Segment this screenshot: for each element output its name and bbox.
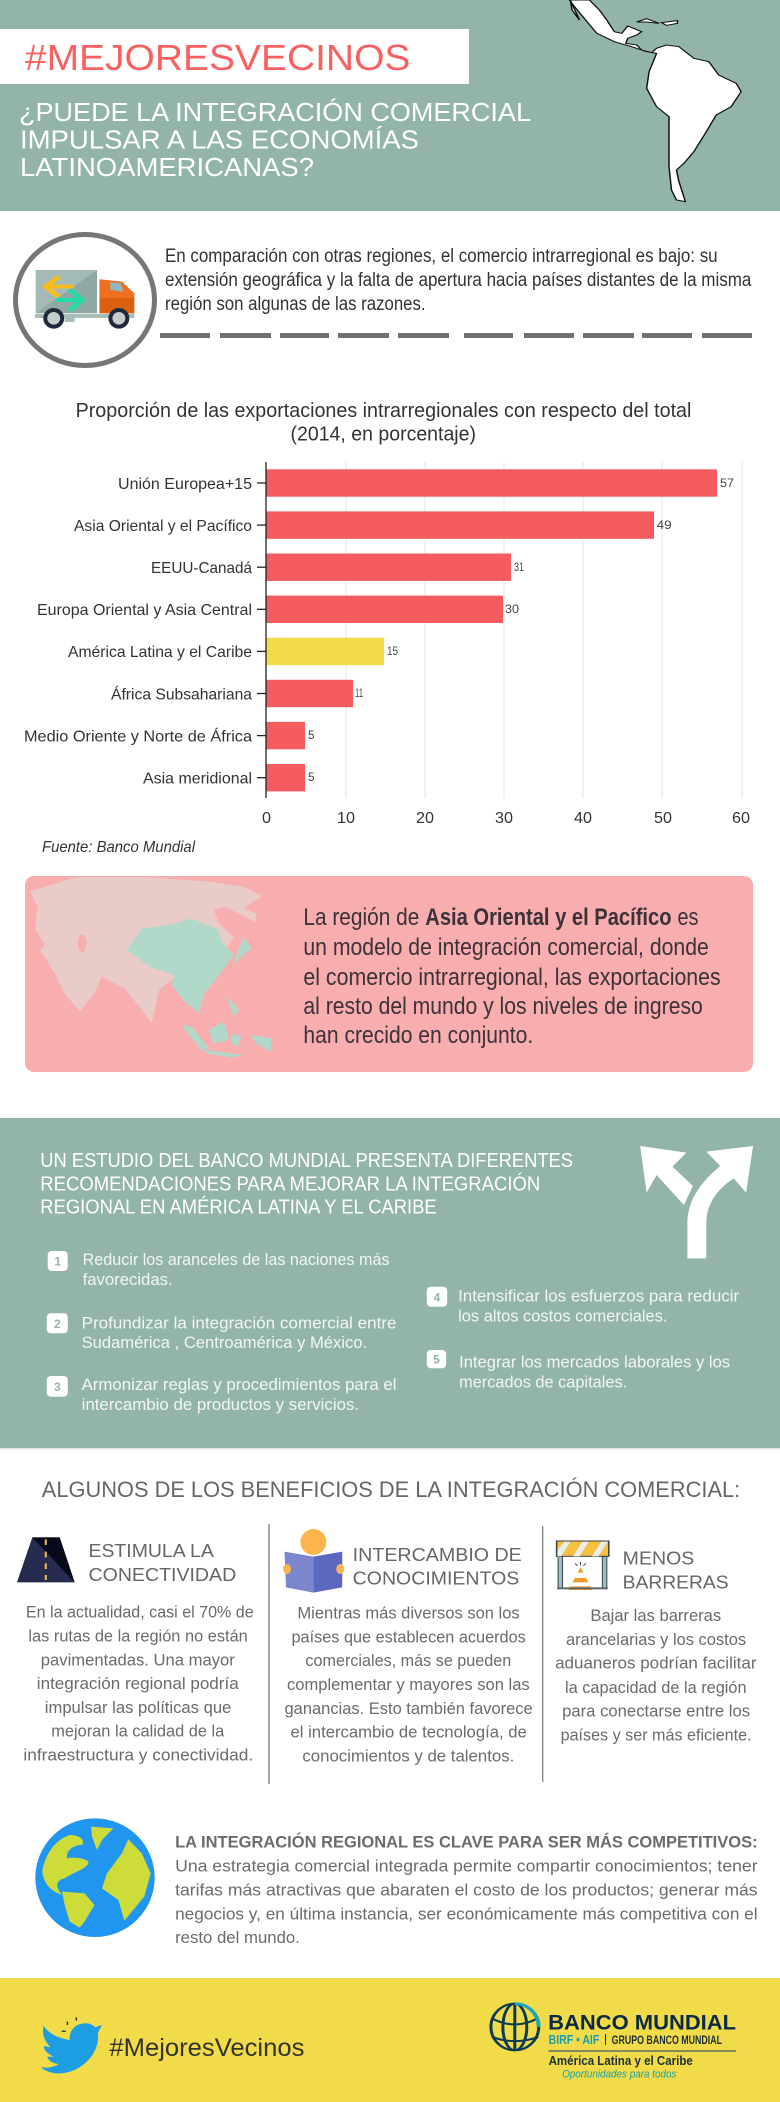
text block: callout: Asia Oriental y el Pacífico [425, 904, 672, 931]
value labels: 5 [308, 728, 315, 742]
list item 4: 4 [434, 1290, 441, 1304]
text block: intro: región son algunas de las razones. [165, 294, 426, 315]
text block: competitiveness: Una estrategia comercial integrada permite compartir conocimientos; tener [175, 1857, 758, 1876]
body text: países y ser más eficiente. [561, 1726, 752, 1745]
x axis labels: 40 [574, 810, 592, 827]
body text: impulsar las políticas que [45, 1698, 231, 1717]
subheading [88, 1540, 236, 1585]
heading: recommendations: RECOMENDACIONES PARA MEJORAR LA INTEGRACIÓN [40, 1172, 540, 1196]
body text: arancelarias y los costos [566, 1630, 746, 1649]
icon: map of Asia [30, 877, 271, 1057]
body text: ganancias. Esto también favorece [284, 1699, 533, 1718]
panel: Asia callout [25, 876, 753, 1072]
list item 3 [47, 1375, 397, 1414]
body text: complementar y mayores son las [287, 1675, 530, 1694]
value labels [308, 476, 734, 784]
x axis labels: 50 [654, 810, 672, 827]
body text: el intercambio de tecnología, de [290, 1723, 527, 1742]
benefit column: connectivity [17, 1537, 254, 1765]
panel: bar chart [24, 400, 750, 856]
list item 3: 3 [54, 1380, 61, 1394]
icon: truck in circle [16, 234, 154, 366]
body text: Mientras más diversos son los [297, 1603, 520, 1622]
text block: callout: al resto del mundo y los niveles de ingreso [303, 993, 703, 1020]
list item 1: Reducir los aranceles de las naciones más [83, 1250, 389, 1269]
body text: aduaneros podrían facilitar [555, 1654, 757, 1673]
panel: intro [16, 234, 752, 366]
x axis labels: 0 [262, 810, 271, 827]
body text: En la actualidad, casi el 70% de [26, 1603, 254, 1622]
heading: question: IMPULSAR A LAS ECONOMÍAS [20, 124, 419, 154]
list item 1: 1 [54, 1254, 61, 1268]
text block: competitiveness: resto del mundo. [175, 1928, 300, 1947]
body text: infraestructura y conectividad. [23, 1746, 253, 1765]
logo: Banco Mundial [491, 2004, 736, 2081]
icon: globe [35, 1818, 155, 1937]
list item 3: intercambio de productos y servicios. [82, 1395, 359, 1414]
list item 5: 5 [433, 1352, 440, 1366]
value labels: 5 [308, 770, 315, 784]
subheading [353, 1544, 522, 1588]
body text [555, 1606, 757, 1745]
benefit column: barriers [555, 1541, 757, 1745]
x axis labels [262, 810, 750, 827]
category labels: África Subsahariana [111, 684, 252, 704]
list item 4 [427, 1287, 739, 1326]
body text: conocimientos y de talentos. [302, 1747, 514, 1766]
text block: intro [165, 246, 752, 315]
x axis labels: 20 [416, 810, 434, 827]
heading: question [19, 97, 531, 182]
list item 4: Intensificar los esfuerzos para reducir [458, 1287, 739, 1306]
subheading [623, 1548, 729, 1592]
value labels: 15 [387, 644, 398, 658]
category labels: Medio Oriente y Norte de África [24, 726, 252, 746]
x axis labels: 60 [732, 810, 750, 827]
panel: header [0, 0, 780, 211]
source note: Fuente: Banco Mundial [42, 839, 195, 856]
category labels: EEUU-Canadá [151, 560, 252, 577]
icon: twitter bird [41, 2017, 102, 2073]
logo: Banco Mundial: Oportunidades para todos [562, 2069, 677, 2081]
value labels: 30 [505, 602, 519, 616]
panel: competitiveness [35, 1818, 758, 1947]
body text: la capacidad de la región [565, 1678, 747, 1697]
chart title [76, 400, 691, 446]
subheading: CONECTIVIDAD [88, 1564, 236, 1585]
body text: pavimentadas. Una mayor [41, 1650, 235, 1669]
bars [266, 469, 717, 791]
text block: intro: En comparación con otras regiones, el comercio intrarregional es bajo: su [165, 246, 718, 267]
benefit column: knowledge [283, 1529, 533, 1766]
subheading: MENOS [623, 1548, 694, 1568]
panel: footer [0, 1978, 780, 2102]
list item 4: los altos costos comerciales. [458, 1307, 668, 1326]
chart title: Proporción de las exportaciones intrarregionales con respecto del total [76, 400, 691, 422]
body text: para conectarse entre los [562, 1702, 750, 1721]
text block: callout: es [678, 904, 698, 931]
heading: recommendations: REGIONAL EN AMÉRICA LATINA Y EL CARIBE [40, 1196, 437, 1218]
category labels: Unión Europea+15 [118, 476, 252, 493]
subheading: INTERCAMBIO DE [353, 1544, 522, 1565]
text block: competitiveness: LA INTEGRACIÓN REGIONAL ES CLAVE PARA SER MÁS COMPETITIVOS: [175, 1833, 758, 1852]
list item 2 [47, 1313, 397, 1352]
title banner [0, 29, 469, 84]
logo: Banco Mundial: BIRF • AIF [549, 2032, 599, 2047]
chart title: (2014, en porcentaje) [290, 424, 476, 446]
x axis labels: 10 [337, 810, 355, 827]
subheading: CONOCIMIENTOS [353, 1568, 519, 1588]
body text [284, 1603, 533, 1766]
value labels: 49 [657, 518, 672, 532]
value labels: 11 [355, 686, 363, 700]
text block: callout [303, 904, 721, 1049]
body text: las rutas de la región no están [28, 1627, 248, 1646]
category labels: América Latina y el Caribe [68, 644, 252, 661]
list item 5: Integrar los mercados laborales y los [459, 1352, 730, 1371]
icon: road [17, 1537, 75, 1582]
icon: map of Latin America [570, 0, 741, 202]
heading: question: LATINOAMERICANAS? [20, 152, 314, 182]
list item 5 [427, 1350, 730, 1391]
logo: Banco Mundial: GRUPO BANCO MUNDIAL [612, 2035, 722, 2047]
body text: países que establecen acuerdos [292, 1627, 526, 1646]
category labels: Asia Oriental y el Pacífico [74, 518, 252, 535]
heading: recommendations [40, 1150, 573, 1218]
body text: Bajar las barreras [590, 1606, 721, 1625]
list item 1: favorecidas. [83, 1270, 173, 1289]
text block: competitiveness: negocios y, en última instancia, ser económicamente más competitiva con el [175, 1904, 758, 1923]
category labels: Asia meridional [143, 770, 252, 788]
logo: Banco Mundial: BANCO MUNDIAL [548, 2011, 736, 2034]
panel: recommendations [0, 1118, 780, 1450]
hashtag: #MejoresVecinos [109, 2034, 304, 2062]
value labels: 57 [720, 476, 734, 490]
heading: question: ¿PUEDE LA INTEGRACIÓN COMERCIAL [19, 97, 531, 127]
heading: benefits: ALGUNOS DE LOS BENEFICIOS DE LA INTEGRACIÓN COMERCIAL: [42, 1477, 740, 1502]
list item 5: mercados de capitales. [459, 1372, 627, 1391]
text block: callout: un modelo de integración comercial, donde [303, 934, 709, 961]
subheading: ESTIMULA LA [88, 1540, 214, 1561]
icon: person reading [283, 1529, 344, 1593]
text block: callout: han crecido en conjunto. [303, 1022, 533, 1049]
list item 2: 2 [54, 1317, 61, 1331]
list item 2: Profundizar la integración comercial entre [82, 1313, 397, 1332]
body text [23, 1603, 254, 1765]
panel: benefits [17, 1477, 757, 1784]
text block: competitiveness: tarifas más atractivas que abaraten el costo de los productos; generar más [175, 1880, 758, 1899]
icon: logo globe [491, 2004, 539, 2050]
x axis labels: 30 [495, 810, 513, 827]
heading: recommendations: UN ESTUDIO DEL BANCO MUNDIAL PRESENTA DIFERENTES [40, 1150, 573, 1172]
subheading: BARRERAS [623, 1572, 729, 1592]
body text: mejoran la calidad de la [51, 1722, 225, 1741]
text block: callout: La región de [303, 904, 419, 931]
list item 3: Armonizar reglas y procedimientos para el [82, 1375, 396, 1394]
text block: competitiveness [175, 1833, 758, 1947]
icon: road barrier [557, 1541, 609, 1590]
logo: Banco Mundial: América Latina y el Caribe [549, 2053, 693, 2068]
text block: callout: el comercio intrarregional, las exportaciones [303, 964, 721, 991]
icon: fork arrows [640, 1146, 753, 1258]
value labels: 31 [514, 560, 524, 574]
body text: comerciales, más se pueden [305, 1651, 511, 1670]
category labels: Europa Oriental y Asia Central [37, 602, 252, 619]
category labels [24, 476, 252, 788]
list item 2: Sudamérica , Centroamérica y México. [82, 1333, 367, 1352]
title banner: #MEJORESVECINOS [25, 37, 410, 78]
list item 1 [48, 1250, 389, 1289]
body text: integración regional podría [37, 1674, 239, 1693]
